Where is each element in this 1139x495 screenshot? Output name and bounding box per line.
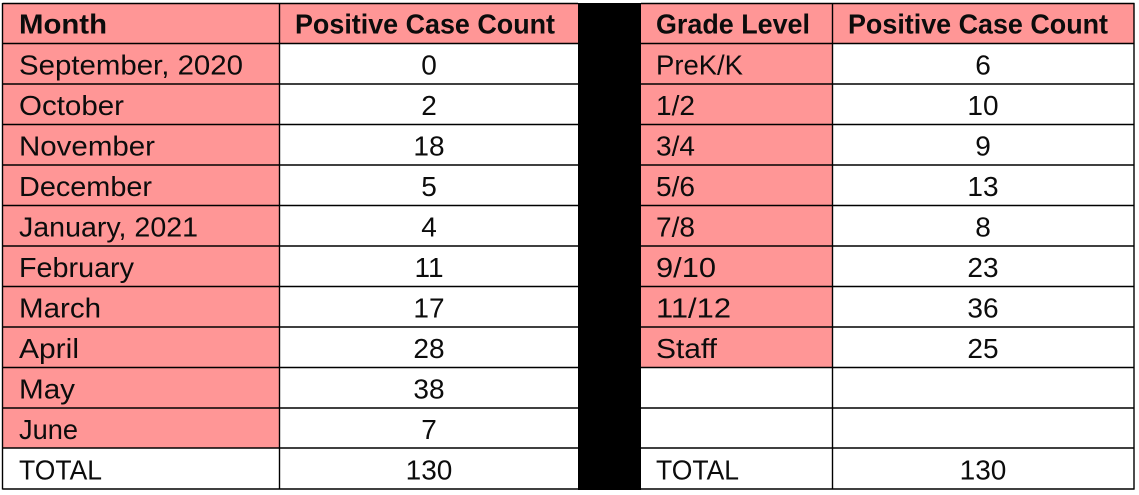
month labels: TOTAL bbox=[19, 454, 102, 486]
grade labels: 1/2 bbox=[656, 90, 695, 121]
grade table grid bbox=[641, 3, 1134, 490]
month labels: October bbox=[19, 90, 124, 121]
grade column background bbox=[641, 43, 832, 367]
grade table header text: Positive Case Count bbox=[848, 8, 1108, 40]
month case counts: 2 bbox=[421, 90, 437, 121]
panel: cases by month table bbox=[2, 3, 578, 490]
month table header text bbox=[19, 8, 555, 40]
month labels: September, 2020 bbox=[19, 50, 243, 80]
month case counts: 4 bbox=[421, 212, 437, 242]
month table header background bbox=[3, 3, 578, 43]
grade case counts: 6 bbox=[975, 50, 991, 80]
month labels: November bbox=[19, 130, 155, 162]
grade labels: 5/6 bbox=[656, 171, 695, 202]
month case counts: 28 bbox=[413, 333, 445, 364]
month case counts: 5 bbox=[421, 171, 437, 202]
grade case counts: 130 bbox=[960, 454, 1006, 486]
grade case counts: 23 bbox=[967, 252, 999, 283]
grade case counts: 13 bbox=[967, 171, 999, 202]
month case counts: 0 bbox=[421, 50, 437, 80]
grade case counts: 25 bbox=[967, 333, 999, 364]
grade labels: 11/12 bbox=[656, 292, 731, 324]
grade table header text bbox=[656, 8, 1108, 40]
grade labels: PreK/K bbox=[656, 50, 743, 80]
month labels: March bbox=[19, 292, 101, 324]
grade table header text: Grade Level bbox=[656, 8, 810, 40]
month case counts: 11 bbox=[414, 252, 444, 283]
month case counts: 7 bbox=[421, 414, 437, 445]
month case counts: 17 bbox=[413, 292, 445, 324]
grade case counts: 8 bbox=[975, 212, 991, 242]
panel: cases by grade level table bbox=[641, 3, 1134, 490]
grade labels: 3/4 bbox=[656, 130, 695, 162]
month labels: April bbox=[19, 333, 79, 364]
grade case counts bbox=[960, 50, 1006, 486]
month labels: January, 2021 bbox=[19, 212, 198, 242]
grade case counts: 10 bbox=[967, 90, 999, 121]
month labels: May bbox=[19, 374, 75, 404]
month labels: December bbox=[19, 171, 152, 202]
month labels: February bbox=[19, 252, 134, 283]
month case counts: 130 bbox=[406, 454, 452, 486]
month table header text: Positive Case Count bbox=[295, 8, 555, 40]
grade table header background bbox=[641, 4, 1134, 43]
month case counts bbox=[406, 50, 452, 486]
month labels: June bbox=[19, 414, 78, 445]
grade labels bbox=[656, 50, 743, 486]
grade case counts: 9 bbox=[975, 130, 991, 162]
month labels bbox=[19, 50, 243, 486]
month table grid bbox=[2, 3, 578, 490]
grade labels: 9/10 bbox=[656, 252, 716, 283]
month column background bbox=[3, 43, 279, 448]
grade case counts: 36 bbox=[967, 292, 999, 324]
grade labels: Staff bbox=[656, 333, 717, 364]
month case counts: 18 bbox=[413, 130, 445, 162]
month table header text: Month bbox=[19, 8, 107, 40]
grade labels: TOTAL bbox=[656, 454, 739, 486]
grade labels: 7/8 bbox=[656, 212, 695, 242]
month case counts: 38 bbox=[413, 374, 445, 404]
black divider column bbox=[578, 3, 641, 490]
